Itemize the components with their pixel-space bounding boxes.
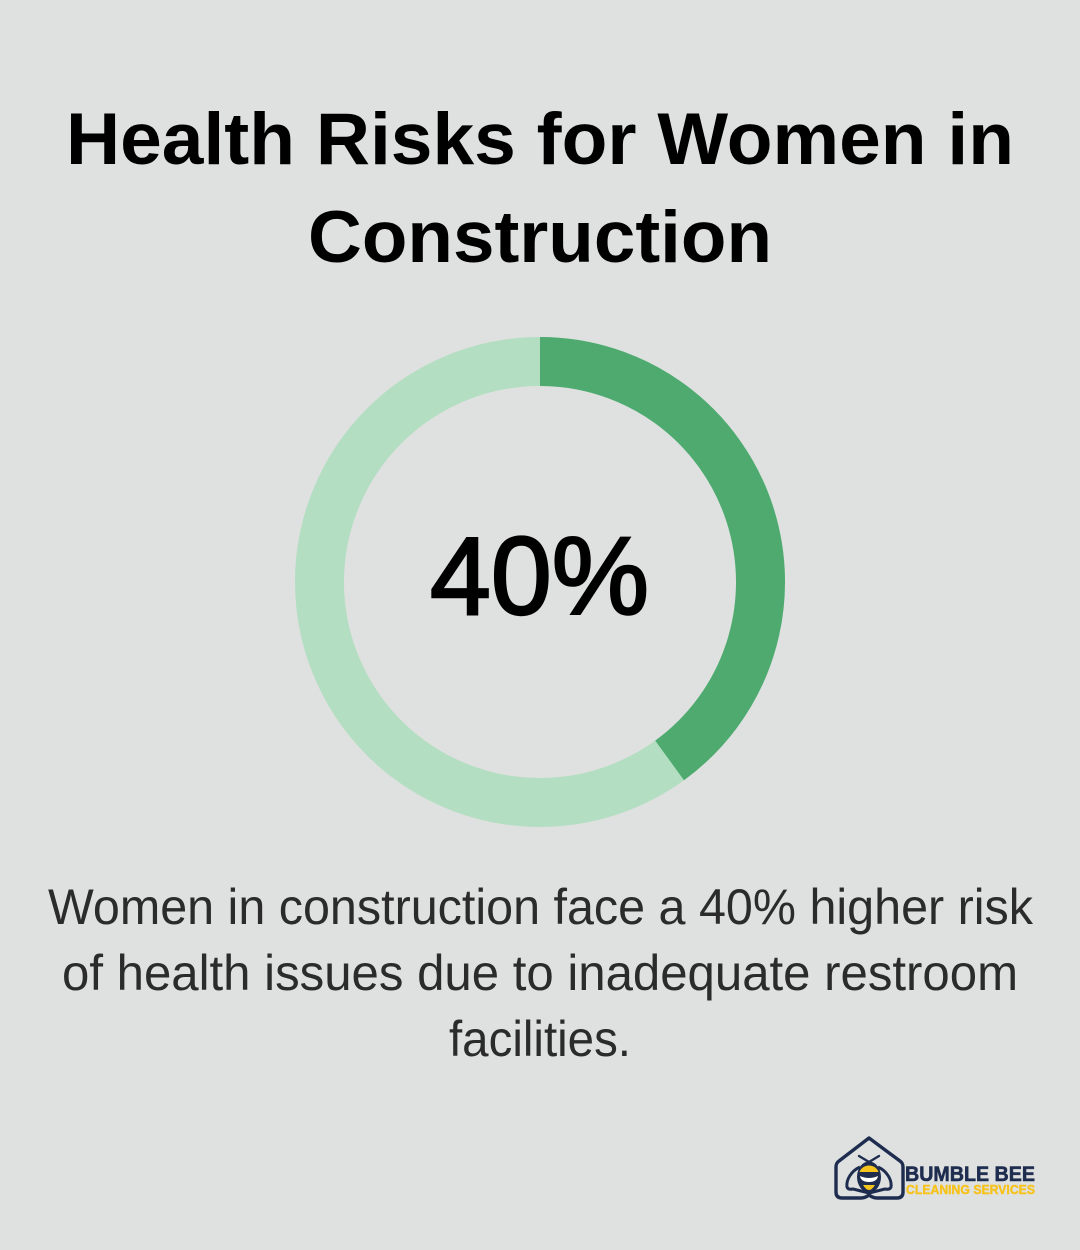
- icon: house outline: [836, 1138, 903, 1198]
- description text: Women in construction face a 40% higher risk: [48, 879, 1034, 935]
- description text: facilities.: [449, 1011, 631, 1067]
- description text: [48, 879, 1034, 1067]
- donut track: [320, 362, 760, 802]
- title: [66, 99, 1014, 278]
- title: Health Risks for Women in: [66, 99, 1014, 180]
- icon: bee: [847, 1156, 891, 1193]
- logo wordmark: BUMBLE BEE: [905, 1162, 1035, 1186]
- description text: of health issues due to inadequate restroom: [62, 945, 1018, 1001]
- logo tagline: CLEANING SERVICES: [906, 1183, 1035, 1197]
- donut value arc: [540, 362, 761, 760]
- logo: Bumble Bee Cleaning Services: [836, 1138, 1035, 1198]
- center value: 40%: [430, 515, 649, 638]
- donut chart: 40 percent: [320, 362, 761, 802]
- title: Construction: [308, 197, 772, 278]
